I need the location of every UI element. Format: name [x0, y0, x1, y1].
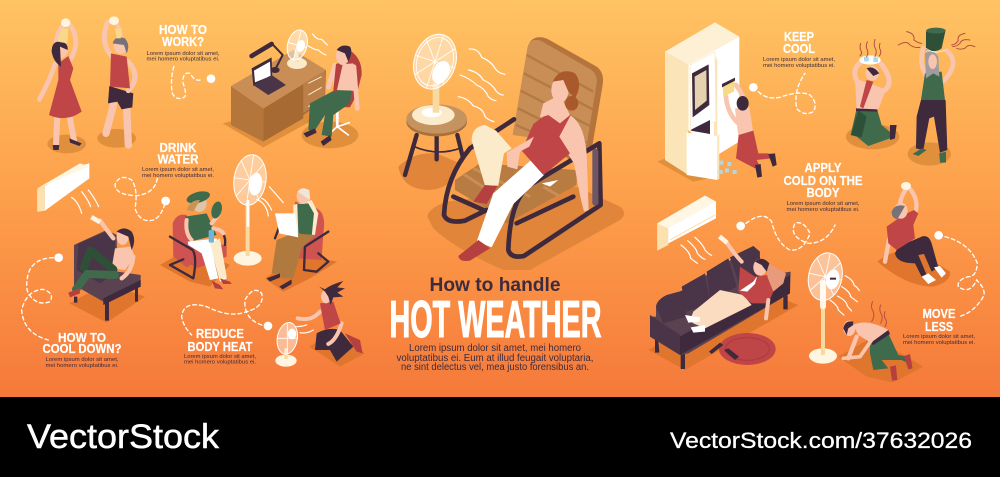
label: reduce body heat — [184, 327, 256, 366]
label: drink water: mei homero voluptatibus ei. — [142, 173, 214, 179]
footer bar — [0, 397, 1000, 477]
person sitting on floor — [877, 182, 950, 287]
label: how to cool down: HOW TO — [58, 331, 106, 345]
air conditioner right — [657, 196, 716, 263]
intro text: voluptatibus ei. Eum at illud feugait voluptaria, — [396, 353, 594, 364]
label: move less — [903, 307, 975, 346]
label: keep cool — [763, 30, 835, 69]
label: move less: LESS — [925, 320, 953, 334]
man on office chair — [302, 46, 362, 148]
dot: how to work — [207, 74, 215, 83]
label: reduce body heat: REDUCE — [196, 327, 244, 341]
label: how to work: HOW TO — [159, 23, 207, 37]
label: how to work: WORK? — [162, 35, 204, 49]
dashed connector: apply cold — [746, 216, 835, 250]
chair seat — [455, 163, 577, 223]
label: apply cold on the body: APPLY — [804, 161, 842, 175]
sofa with man — [648, 235, 798, 370]
fridge — [657, 22, 739, 182]
air conditioner left — [37, 163, 99, 213]
label: move less: mei homero voluptatibus ei. — [903, 340, 975, 346]
label: how to cool down: Lorem ipsum dolor sit amet, — [46, 357, 119, 363]
old woman on red chair with bottle — [160, 189, 232, 289]
title block — [390, 275, 602, 373]
label: drink water: WATER — [158, 152, 198, 166]
woman seated — [458, 71, 589, 261]
intro text: Lorem ipsum dolor sit amet, mei homero — [409, 343, 581, 354]
top-left illustrations — [39, 16, 362, 221]
subtitle: How to handle — [430, 275, 560, 296]
top-right illustrations — [657, 22, 975, 182]
label: drink water: Lorem ipsum dolor sit amet, — [142, 167, 214, 173]
label: move less: Lorem ipsum dolor sit amet, — [903, 334, 975, 340]
dashed connector: how to work — [171, 66, 200, 99]
label: drink water: DRINK — [160, 141, 196, 155]
main title: HOT WEATHER — [390, 291, 602, 349]
desk with laptop, lamp and fan — [223, 28, 328, 147]
kneeling man with ice on head — [846, 39, 899, 149]
label: apply cold on the body: BODY — [806, 186, 840, 200]
intro text — [396, 343, 594, 373]
label: reduce body heat: BODY HEAT — [188, 340, 253, 354]
dot: drink water — [161, 197, 170, 205]
man at fridge — [722, 78, 777, 178]
label: how to work — [146, 23, 220, 62]
dashed connector: move less — [945, 237, 984, 317]
label: how to cool down — [42, 331, 122, 369]
dashed connector: drink water — [115, 177, 166, 221]
chair frame and rockers — [444, 119, 601, 257]
dot: move less — [934, 231, 943, 240]
lower-right illustrations — [648, 182, 984, 383]
air waves — [458, 49, 505, 122]
label: how to work: Lorem ipsum dolor sit amet, — [146, 51, 220, 57]
dashed connector: keep cool — [758, 73, 815, 114]
red rug and shoes — [709, 333, 776, 365]
old man reading newspaper — [265, 188, 337, 292]
footer image id: VectorStock.com/37632026 — [670, 428, 972, 453]
intro text: ne sint delectus vel, mea justo forensibus an. — [401, 362, 589, 373]
label: apply cold on the body — [784, 161, 862, 213]
label: move less: MOVE — [922, 307, 956, 321]
label: apply cold on the body: mei homero voluptatibus ei. — [786, 207, 860, 213]
label: how to cool down: COOL DOWN? — [42, 342, 122, 356]
dot: apply cold — [736, 222, 745, 230]
dot: cool down — [54, 253, 63, 262]
label: apply cold on the body: COLD ON THE — [784, 174, 862, 188]
label: reduce body heat: mei homero voluptatibus ei. — [184, 360, 256, 366]
lower-left illustrations — [22, 153, 365, 367]
dot: reduce body heat — [264, 322, 272, 330]
woman pouring bucket — [898, 28, 975, 166]
label: keep cool: Lorem ipsum dolor sit amet, — [763, 57, 835, 63]
floor shadows — [398, 153, 624, 270]
rocking chair back — [513, 37, 603, 160]
dashed connector: reduce body heat — [182, 290, 262, 335]
label: how to cool down: mei homero voluptatibus ei. — [46, 363, 119, 369]
label: keep cool: COOL — [783, 42, 815, 56]
label: apply cold on the body: Lorem ipsum dolor sit amet, — [786, 201, 860, 207]
label: reduce body heat: Lorem ipsum dolor sit amet, — [184, 354, 256, 360]
table with fan — [405, 29, 467, 175]
standing fan right — [804, 250, 859, 364]
label: drink water — [142, 141, 214, 179]
crawling person — [838, 302, 923, 383]
dot: keep cool — [749, 83, 758, 92]
man in red vest with ice — [97, 16, 136, 148]
label: how to work: mei homero voluptatibus ei. — [146, 56, 220, 62]
ice cubes — [719, 161, 737, 174]
label: keep cool: mei homero voluptatibus ei. — [763, 63, 835, 69]
central illustration: woman in rocking chair with fan — [398, 29, 624, 270]
dashed connector: cool down — [22, 258, 53, 340]
woman in red dress with ice — [39, 18, 86, 153]
label: keep cool: KEEP — [784, 30, 814, 44]
kneeling woman with small fan — [275, 281, 365, 367]
woman on armchair — [68, 215, 145, 323]
footer brand: VectorStock — [27, 418, 220, 456]
floor standing fan — [231, 153, 283, 266]
